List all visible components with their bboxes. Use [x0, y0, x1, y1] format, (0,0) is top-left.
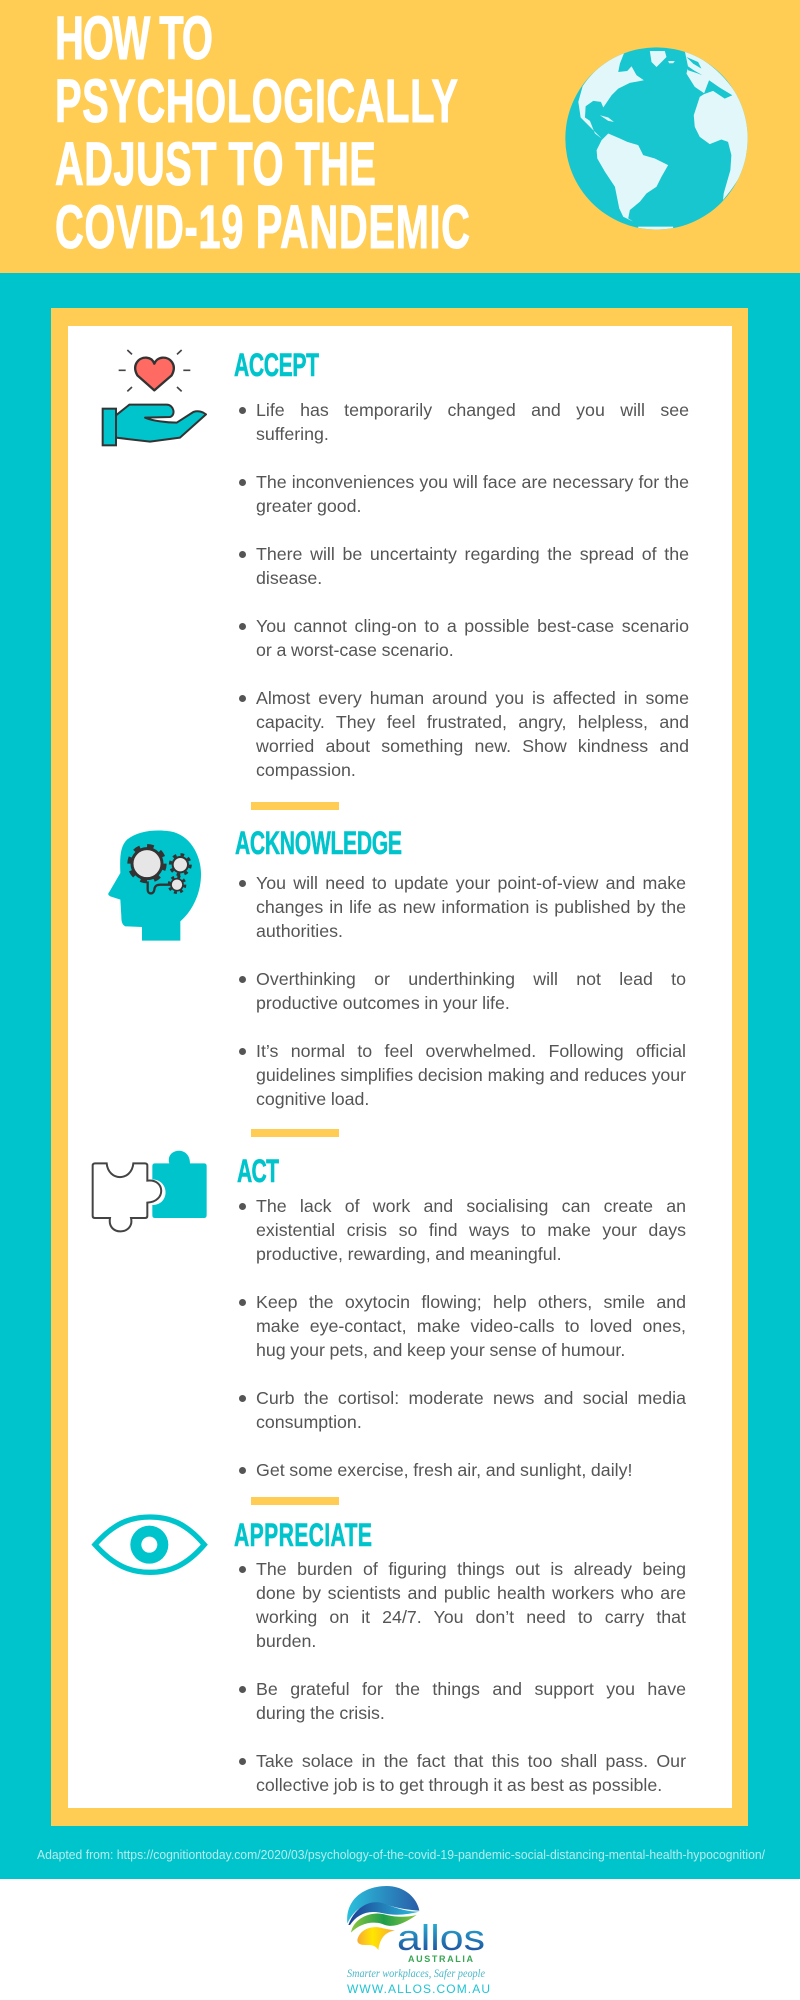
bullet: life changed: suffering. [256, 424, 329, 444]
bullet: overthinking: Overthinking or underthinking will not lead to [256, 969, 686, 989]
title: ADJUST TO THE [55, 129, 376, 198]
source credit: Adapted from: https://cognitiontoday.com/2020/03/psychology-of-the-covid-19-pandemic-social-distancing-mental-health-hypocognition/ [37, 1848, 765, 1862]
bullet: overwhelmed: guidelines simplifies decision making and reduces your [256, 1065, 686, 1085]
bullet: update point of view: You will need to update your point-of-view and make [256, 873, 686, 893]
header banner [0, 0, 800, 273]
title: HOW TO [55, 5, 213, 72]
bullet: lack of work: existential crisis so find ways to make your days [256, 1220, 686, 1240]
bullet: kindness: capacity. They feel frustrated, angry, helpless, and [256, 712, 689, 732]
bullet: kindness: worried about something new. Show kindness and [256, 736, 689, 756]
bullet: inconveniences: greater good. [256, 496, 361, 516]
heading: accept: ACCEPT [234, 346, 319, 383]
bullet: solace: collective job is to get through it as best as possible. [256, 1775, 662, 1795]
heading: acknowledge: ACKNOWLEDGE [235, 824, 402, 861]
bullet: cortisol [256, 1386, 686, 1434]
bullet: kindness: compassion. [256, 760, 356, 780]
bullet: solace: Take solace in the fact that this too shall pass. Our [256, 1751, 686, 1771]
heading: appreciate: APPRECIATE [234, 1516, 372, 1553]
bullet: scenario: or a worst-case scenario. [256, 640, 454, 660]
section: act [92, 1150, 686, 1480]
icon: head with gears [108, 830, 202, 941]
bullet: kindness: Almost every human around you is affected in some [256, 688, 689, 708]
section: accept [102, 346, 689, 780]
bullet: overthinking: productive outcomes in your life. [256, 993, 510, 1013]
bullet: oxytocin: hug your pets, and keep your sense of humour. [256, 1340, 625, 1360]
logo sub-mark: AUSTRALIA [408, 1954, 474, 1964]
bullet: scenario [256, 614, 689, 662]
bullet: lack of work: productive, rewarding, and meaningful. [256, 1244, 562, 1264]
bullet: burden: working on it 24/7. You don’t need to carry that [256, 1607, 686, 1627]
section: appreciate [92, 1514, 686, 1795]
bullet: oxytocin: Keep the oxytocin flowing; help others, smile and [256, 1292, 686, 1312]
logo: allos australia [347, 1886, 490, 1996]
bullet: exercise: Get some exercise, fresh air, and sunlight, daily! [256, 1460, 632, 1480]
bullet: kindness [256, 686, 689, 782]
bullet: oxytocin [256, 1290, 686, 1362]
bullet: burden [256, 1557, 686, 1653]
bullet: cortisol: Curb the cortisol: moderate news and social media [256, 1388, 686, 1408]
bullet: overwhelmed: cognitive load. [256, 1089, 369, 1109]
bullet: lack of work: The lack of work and socialising can create an [256, 1196, 686, 1216]
bullet: update point of view: authorities. [256, 921, 343, 941]
bullet: grateful [256, 1677, 686, 1725]
icon: eye [92, 1514, 208, 1575]
bullet: grateful: Be grateful for the things and support you have [256, 1679, 686, 1699]
bullet: uncertainty [256, 542, 689, 590]
title: PSYCHOLOGICALLY [55, 66, 458, 135]
bullet: lack of work [256, 1194, 686, 1266]
bullet: inconveniences: The inconveniences you will face are necessary for the [256, 472, 689, 492]
icon: globe [565, 47, 748, 230]
title [55, 5, 470, 255]
bullet: update point of view [256, 871, 686, 943]
bullet: uncertainty: disease. [256, 568, 322, 588]
bullet: solace [256, 1749, 686, 1797]
panel: yellow frame [51, 308, 748, 1826]
bullet: overwhelmed: It’s normal to feel overwhelmed. Following official [256, 1041, 686, 1061]
heading: act: ACT [237, 1152, 279, 1189]
bullet: life changed [256, 398, 689, 446]
logo wordmark: allos [397, 1917, 485, 1958]
logo mark [347, 1886, 419, 1950]
bullet: uncertainty: There will be uncertainty regarding the spread of the [256, 544, 689, 564]
bullet: scenario: You cannot cling-on to a possible best-case scenario [256, 616, 689, 636]
bullet: overthinking [256, 967, 686, 1015]
bullet: burden: burden. [256, 1631, 316, 1651]
bullet: grateful: during the crisis. [256, 1703, 385, 1723]
bullet: oxytocin: make eye-contact, make video-calls to loved ones, [256, 1316, 686, 1336]
bullet: cortisol: consumption. [256, 1412, 362, 1432]
section: acknowledge [108, 824, 686, 1109]
icon: puzzle pieces [92, 1150, 207, 1232]
bullet: life changed: Life has temporarily changed and you will see [256, 400, 689, 420]
panel: white content [68, 326, 732, 1808]
bullet: update point of view: changes in life as new information is published by the [256, 897, 686, 917]
bullet: overwhelmed [256, 1039, 686, 1111]
bullet: burden: The burden of figuring things out is already being [256, 1559, 686, 1579]
bullet: burden: done by scientists and public health workers who are [256, 1583, 686, 1603]
bullet: inconveniences [256, 470, 689, 518]
icon: hand with heart [102, 349, 207, 446]
website: WWW.ALLOS.COM.AU [347, 1982, 490, 1996]
